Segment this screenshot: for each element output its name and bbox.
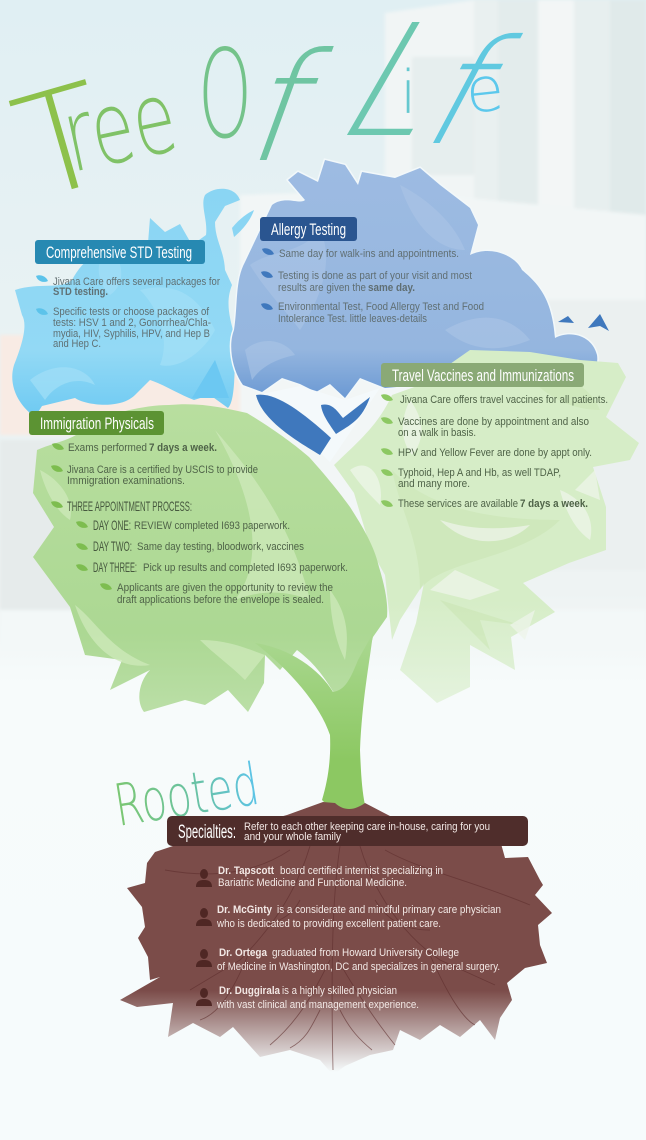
text block: immigration physicals: Immigration examinations. (67, 475, 185, 487)
text block: travel vaccines and immunizations: and many more. (398, 478, 470, 490)
doctor: McGinty (196, 904, 501, 930)
doctor: Tapscott (196, 865, 443, 889)
doctor: McGinty: who is dedicated to providing excellent patient care. (216, 918, 441, 930)
text block: allergy testing: Intolerance Test. little leaves-details (278, 313, 427, 325)
text block: comprehensive STD testing (35, 240, 220, 350)
title: Tree Of Life: i (400, 58, 417, 128)
text block: allergy testing (260, 217, 484, 325)
heading: Rooted: Rooted (110, 750, 263, 840)
text block: comprehensive STD testing: Comprehensive STD Testing (46, 243, 192, 262)
text block: comprehensive STD testing: STD testing. (53, 286, 108, 298)
text block: travel vaccines and immunizations: HPV and Yellow Fever are done by appt only. (398, 447, 592, 459)
icon: doctor (196, 869, 212, 887)
darker frond tints (392, 365, 600, 650)
text block: immigration physicals: DAY ONE: (93, 517, 131, 533)
text block: immigration physicals: Jivana Care is a certified by USCIS to provide (67, 464, 258, 476)
dark blue leaf tips (256, 314, 609, 455)
icon: doctor (196, 908, 212, 926)
leaf shape: pale green (334, 350, 639, 703)
text block: allergy testing: Same day for walk-ins and appointments. (279, 248, 459, 260)
title: Tree Of Life: ree (53, 58, 187, 195)
doctor: Duggirala: is a highly skilled physician (282, 985, 397, 997)
light gaps between fronds (350, 400, 600, 640)
text block: immigration physicals: DAY THREE: (93, 559, 137, 575)
text block: comprehensive STD testing: and Hep C. (53, 338, 101, 350)
text block: comprehensive STD testing: mydia, HIV, Syphilis, HPV, and Hep B (53, 328, 210, 340)
icon: doctor (196, 988, 212, 1006)
text block: allergy testing: results are given the (278, 282, 366, 294)
panel: STD testing leaf (12, 189, 254, 417)
text block: comprehensive STD testing: Jivana Care offers several packages for (53, 276, 220, 288)
text block: immigration physicals: Same day testing, bloodwork, vaccines (137, 541, 304, 553)
text block: travel vaccines and immunizations (381, 363, 608, 510)
doctor: Duggirala (196, 985, 419, 1011)
small leaf sliver (232, 210, 254, 237)
text block: travel vaccines and immunizations: Vaccines are done by appointment and also (398, 416, 589, 428)
doctor: Ortega: Dr. Ortega (219, 947, 268, 959)
title: Tree Of Life: f (396, 8, 537, 178)
text block: comprehensive STD testing: Specific tests or choose packages of (53, 306, 210, 318)
text block: travel vaccines and immunizations: These services are available (398, 498, 518, 510)
roots: specialties (120, 802, 552, 1075)
title: Tree Of Life: T (0, 52, 126, 233)
leaf shape: periwinkle blue (231, 160, 597, 398)
text block: travel vaccines and immunizations: Jivana Care offers travel vaccines for all patients. (400, 394, 608, 406)
panel: travel vaccines leaf (334, 350, 639, 703)
triangle leaf tip (192, 360, 229, 398)
text block: immigration physicals: REVIEW completed I693 paperwork. (134, 520, 290, 532)
doctor: Tapscott: Bariatric Medicine and Functional Medicine. (218, 877, 407, 889)
doctor: McGinty: is a considerate and mindful primary care physician (277, 904, 501, 916)
tree trunk and left leaf: immigration physicals (33, 404, 387, 812)
text block: allergy testing: Environmental Test, Food Allergy Test and Food (278, 301, 484, 313)
doctor: Tapscott: board certified internist specializing in (280, 865, 443, 877)
trunk (255, 633, 373, 812)
text block: immigration physicals (29, 411, 348, 606)
doctor: Duggirala: with vast clinical and management experience. (216, 999, 419, 1011)
text block: immigration physicals: DAY TWO: (93, 538, 132, 554)
title: Tree Of Life: f (227, 21, 344, 196)
specialties banner (167, 816, 528, 846)
text block: allergy testing: Allergy Testing (271, 220, 346, 239)
panel: allergy testing leaf (231, 160, 609, 462)
title: Tree Of Life: O (198, 24, 252, 166)
text block: immigration physicals: Immigration Physicals (40, 414, 154, 433)
doctor: McGinty: Dr. McGinty (217, 904, 273, 916)
root mass (120, 802, 552, 1075)
specialties banner: and your whole family (244, 831, 341, 843)
doctor: Ortega: graduated from Howard University College (272, 947, 459, 959)
text block: travel vaccines and immunizations: Typhoid, Hep A and Hb, as well TDAP, (398, 467, 561, 479)
icon: doctor (196, 949, 212, 967)
doctor: Ortega: of Medicine in Washington, DC and specializes in general surgery. (217, 961, 500, 973)
glow beneath the leaf (262, 386, 380, 462)
text block: allergy testing: same day. (368, 282, 415, 294)
text block: immigration physicals: THREE APPOINTMENT PROCESS: (67, 498, 192, 514)
lighter leaf veins (30, 245, 215, 400)
text block: travel vaccines and immunizations: 7 days a week. (520, 498, 588, 510)
text block: comprehensive STD testing: tests: HSV 1 and 2, Gonorrhea/Chla- (53, 317, 211, 329)
doctor: Tapscott: Dr. Tapscott (218, 865, 274, 877)
doctor: Ortega (196, 947, 500, 973)
title: Tree Of Life: e (462, 51, 507, 128)
text block: immigration physicals: Exams performed (68, 442, 147, 454)
specialties banner: Refer to each other keeping care in-house, caring for you (244, 821, 490, 833)
text block: travel vaccines and immunizations: on a walk in basis. (398, 427, 476, 439)
text block: immigration physicals: Applicants are given the opportunity to review the (117, 582, 333, 594)
text block: allergy testing: Testing is done as part of your visit and most (278, 270, 472, 282)
big leaf shape (33, 404, 387, 712)
light gaps in leaf (40, 430, 347, 680)
text block: immigration physicals: draft applications before the envelope is sealed. (117, 594, 324, 606)
lighter leaf veins (245, 185, 530, 380)
root veins (165, 846, 530, 1070)
specialties banner: Specialties: (178, 822, 236, 843)
title: Tree Of Life (0, 0, 537, 233)
doctor: Duggirala: Dr. Duggirala (219, 985, 281, 997)
leaf shape: light blue (12, 189, 240, 417)
text block: immigration physicals: 7 days a week. (149, 442, 217, 454)
text block: immigration physicals: Pick up results and completed I693 paperwork. (143, 562, 348, 574)
